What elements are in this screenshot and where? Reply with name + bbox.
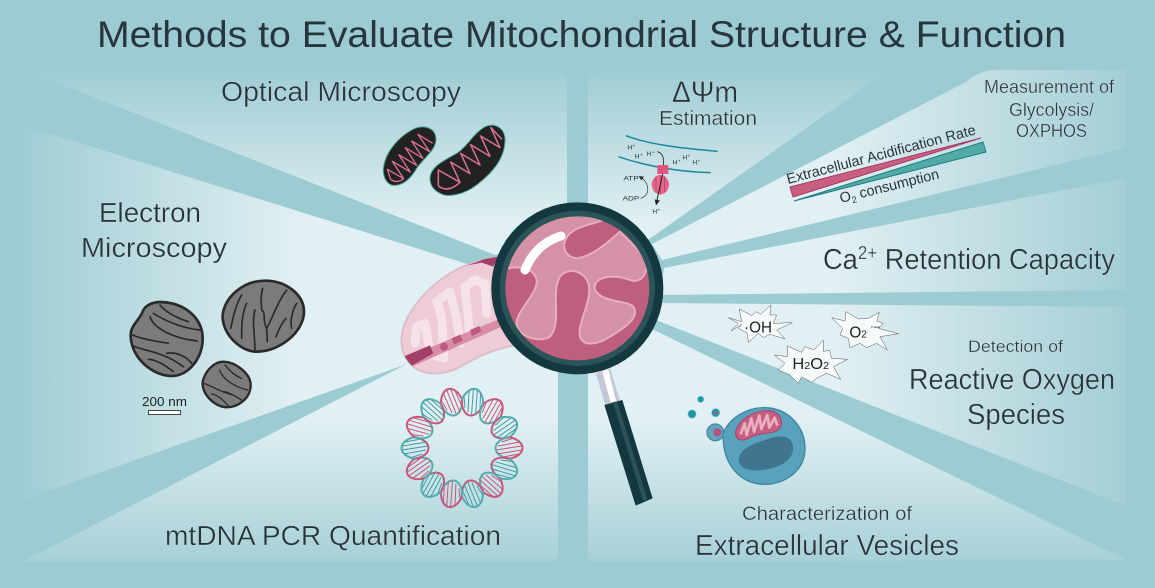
magnifier neck	[596, 368, 620, 405]
heading: characterization of extracellular vesicles: Extracellular Vesicles	[695, 530, 959, 562]
heading: calcium retention capacity: 2+	[858, 243, 877, 263]
icon: ROS burst stars: ·–	[867, 321, 881, 333]
heading: detection of reactive oxygen species: Detection of	[968, 337, 1063, 356]
heading: electron microscopy: Electron	[99, 197, 201, 228]
heading: membrane potential estimation: Estimation	[659, 108, 757, 130]
icon: magnifying glass	[491, 202, 663, 506]
heading: characterization of extracellular vesicles: Characterization of	[742, 504, 913, 525]
icon: membrane potential diagram: H⁺	[652, 208, 661, 215]
panel: mtDNA wedge	[22, 340, 558, 562]
icon: membrane potential diagram	[618, 136, 718, 215]
chart: ECAR and oxygen consumption wedges: O	[838, 189, 853, 207]
icon: ROS burst stars: O2	[849, 324, 867, 341]
icon: membrane potential diagram: ATP	[623, 175, 639, 182]
icon: membrane potential diagram: H⁺	[692, 159, 701, 166]
scale bar	[148, 410, 180, 414]
heading: measurement of glycolysis OXPHOS: Glycolysis/	[1009, 100, 1094, 120]
magnifier grip stripe	[613, 402, 647, 501]
chart: ECAR and oxygen consumption wedges: consumption	[854, 167, 941, 203]
panel: extracellular vesicles wedge	[588, 328, 1126, 562]
magnifier rim	[491, 202, 663, 374]
icon: membrane potential diagram: ADP	[623, 196, 640, 203]
heading: characterization of extracellular vesicles	[695, 504, 959, 562]
icon: electron micrographs of mitochondria	[131, 281, 304, 407]
icon: membrane potential diagram: H⁺	[647, 151, 655, 158]
panel: membrane potential wedge	[588, 72, 886, 242]
heading: measurement of glycolysis OXPHOS: OXPHOS	[1016, 121, 1087, 141]
heading: measurement of glycolysis OXPHOS: Measurement of	[984, 77, 1115, 97]
heading: electron microscopy	[81, 197, 227, 263]
magnified mitochondrion lens	[503, 210, 653, 363]
heading: detection of reactive oxygen species: Species	[967, 399, 1065, 431]
heading: detection of reactive oxygen species	[909, 337, 1115, 431]
heading: membrane potential estimation	[659, 76, 757, 130]
title: Methods to Evaluate Mitochondrial Structure & Function	[97, 14, 1066, 55]
panel: reactive oxygen species wedge	[656, 303, 1126, 506]
heading: mtDNA PCR quantification: mtDNA PCR Quantification	[165, 520, 501, 551]
heading: membrane potential estimation: ΔΨm	[672, 76, 738, 109]
icon: membrane potential diagram: H⁺	[635, 154, 643, 161]
scale bar label: 200 nm: 200 nm	[142, 394, 187, 409]
icon: magnified mitochondrion outline behind lens	[402, 257, 517, 373]
heading: calcium retention capacity: Ca	[823, 244, 860, 276]
heading: detection of reactive oxygen species: Reactive Oxygen	[909, 364, 1115, 396]
icon: ROS burst stars	[728, 305, 898, 383]
panel: electron microscopy wedge	[22, 125, 480, 500]
panel: glycolysis OXPHOS wedge	[652, 70, 1126, 260]
heading: calcium retention capacity: Retention Capacity	[877, 244, 1115, 276]
icon: membrane potential diagram: H⁺	[627, 144, 636, 151]
icon: ROS burst stars: ·OH	[744, 320, 772, 337]
icon: optical microscopy mitochondria	[383, 125, 505, 195]
heading: optical microscopy: Optical Microscopy	[221, 76, 461, 107]
magnifier inner rim	[500, 211, 655, 366]
heading: electron microscopy: Microscopy	[81, 232, 227, 263]
icon: membrane potential diagram: H⁺	[673, 159, 681, 166]
lens highlight	[525, 236, 561, 270]
panel: calcium retention wedge	[660, 178, 1126, 295]
icon: ROS burst stars: H2O2	[792, 356, 829, 373]
heading: measurement of glycolysis OXPHOS	[984, 77, 1115, 141]
panel: optical microscopy wedge	[30, 72, 567, 255]
magnifier neck highlight	[602, 369, 616, 403]
chart: ECAR and oxygen consumption wedges: 2	[851, 194, 858, 205]
icon: cell releasing extracellular vesicles	[688, 396, 805, 484]
icon: mitochondrial DNA ring	[402, 387, 522, 509]
chart: ECAR and oxygen consumption wedges: Extracellular Acidification Rate	[785, 123, 978, 188]
magnifier grip	[604, 400, 653, 506]
icon: membrane potential diagram: H⁺	[682, 154, 691, 161]
